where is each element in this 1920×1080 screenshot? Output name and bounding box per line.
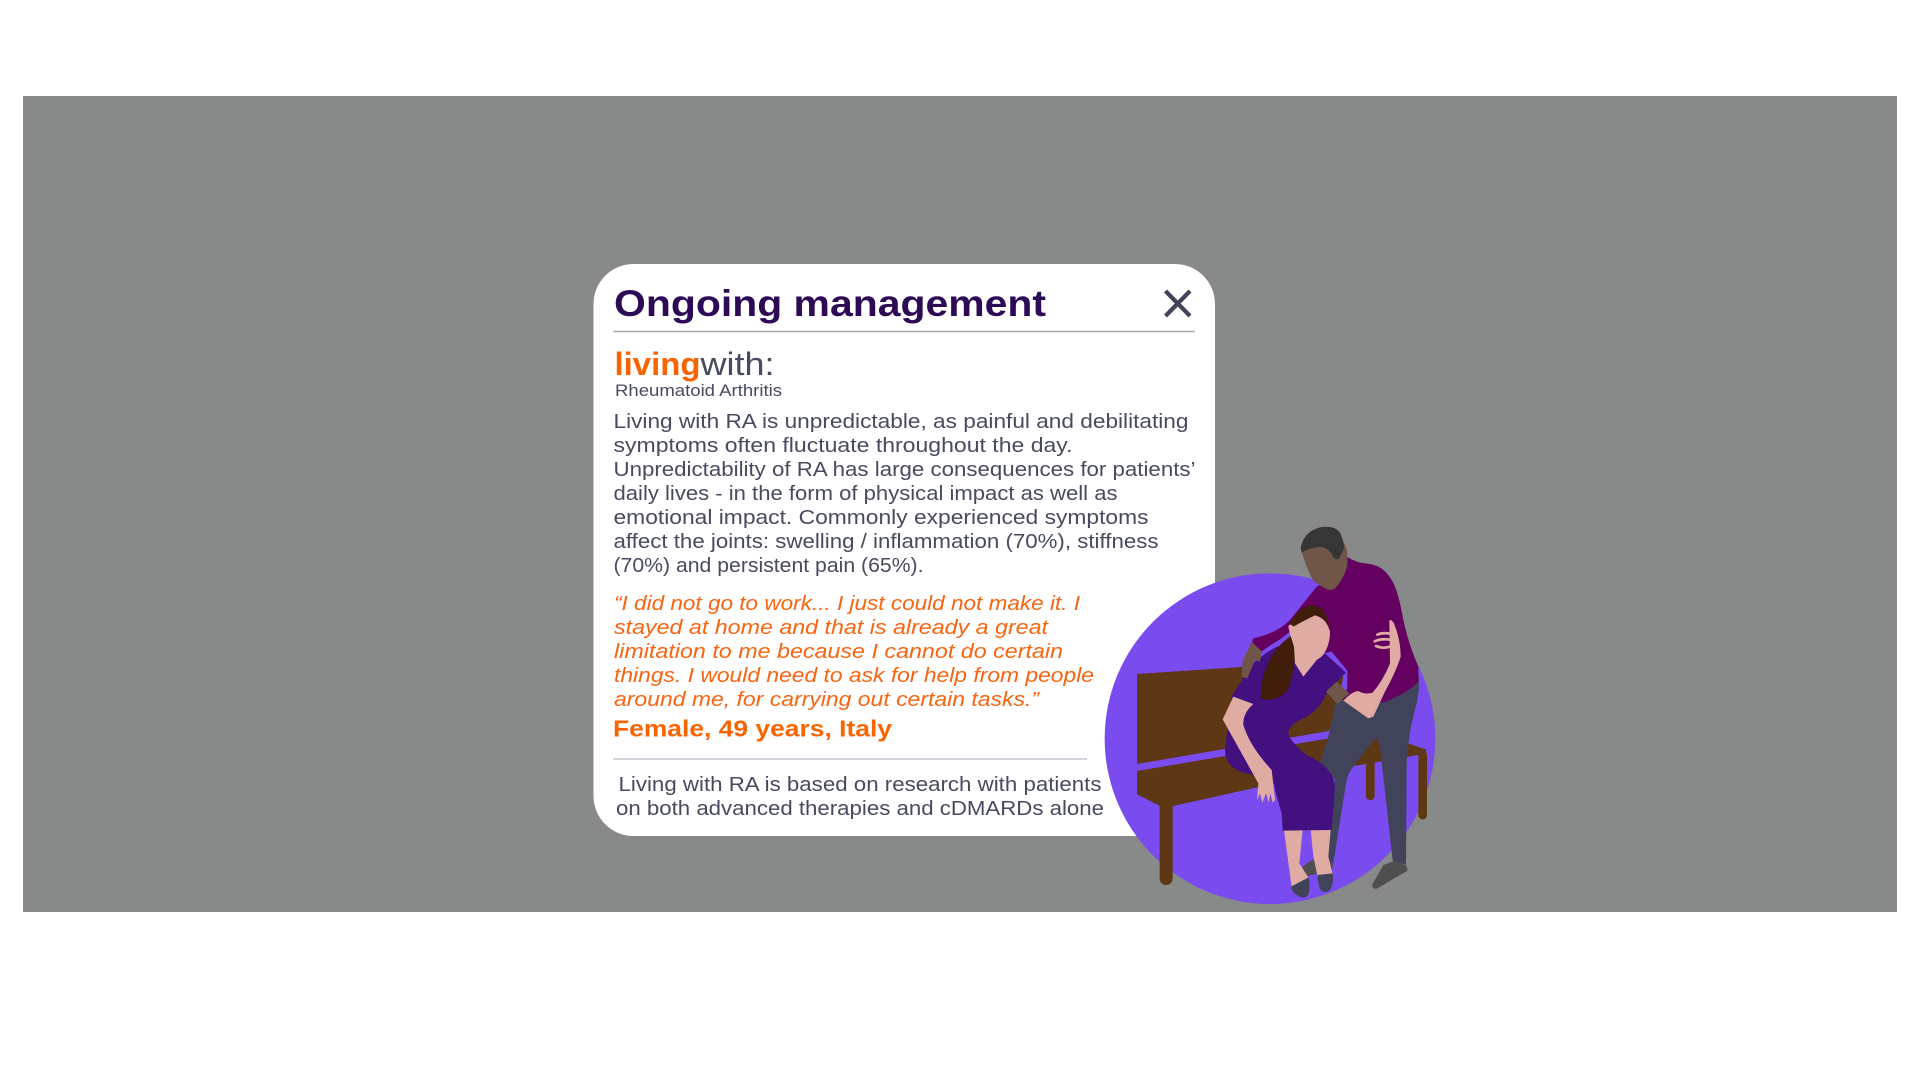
text block: description [614, 411, 1196, 577]
text block: description: symptoms often fluctuate throughout the day. [614, 435, 1072, 457]
quote attribution: Female, 49 years, Italy [613, 716, 892, 742]
patient quote: stayed at home and that is already a great [614, 617, 1050, 639]
purple circle [1105, 573, 1435, 904]
bench [1137, 667, 1427, 885]
man: head [1302, 542, 1348, 590]
man: hair [1301, 527, 1344, 559]
patient quote: “I did not go to work... I just could not make it. I [614, 593, 1080, 615]
woman: face [1288, 615, 1330, 677]
man: hand on shoulder [1242, 642, 1262, 678]
text block: description: Unpredictability of RA has large consequences for patients’ [614, 459, 1196, 481]
icon: close X [1166, 291, 1190, 316]
text block: description: emotional impact. Commonly experienced symptoms [614, 507, 1148, 529]
woman: shoes [1291, 873, 1333, 897]
man: sweater [1252, 557, 1418, 703]
logo: livingwith: with: [699, 346, 774, 382]
patient quote: things. I would need to ask for help from people [614, 665, 1094, 687]
panel: white card [594, 264, 1215, 836]
logo: livingwith [614, 346, 774, 382]
text block: description: Living with RA is unpredictable, as painful and debilitating [614, 411, 1188, 433]
man: trousers [1320, 673, 1419, 865]
text block: description: daily lives - in the form of physical impact as well as [614, 483, 1118, 505]
subtitle: Rheumatoid Arthritis [615, 382, 782, 400]
woman: hair [1261, 605, 1329, 700]
title: Ongoing management [614, 283, 1046, 324]
footnote [616, 774, 1104, 820]
woman: near arm [1223, 697, 1275, 803]
man: hand on wrist [1326, 682, 1349, 704]
man: near shoe [1372, 861, 1408, 889]
patient quote: limitation to me because I cannot do certain [614, 641, 1063, 663]
woman: legs [1284, 830, 1333, 887]
illustration: couple on a bench [1105, 527, 1435, 904]
woman: dress [1225, 646, 1346, 831]
logo: livingwith: living [614, 346, 700, 382]
footnote: Living with RA is based on research with patients [618, 774, 1102, 796]
text block: description: (70%) and persistent pain (65%). [614, 555, 924, 577]
text block: description: affect the joints: swelling / inflammation (70%), stiffness [614, 531, 1158, 553]
grey backdrop panel [23, 96, 1897, 912]
patient quote: around me, for carrying out certain tasks.” [614, 689, 1041, 711]
footnote: on both advanced therapies and cDMARDs alone [616, 798, 1104, 820]
man: far shoe [1302, 859, 1333, 877]
patient quote [614, 593, 1094, 711]
woman: far arm and hand [1343, 620, 1401, 718]
